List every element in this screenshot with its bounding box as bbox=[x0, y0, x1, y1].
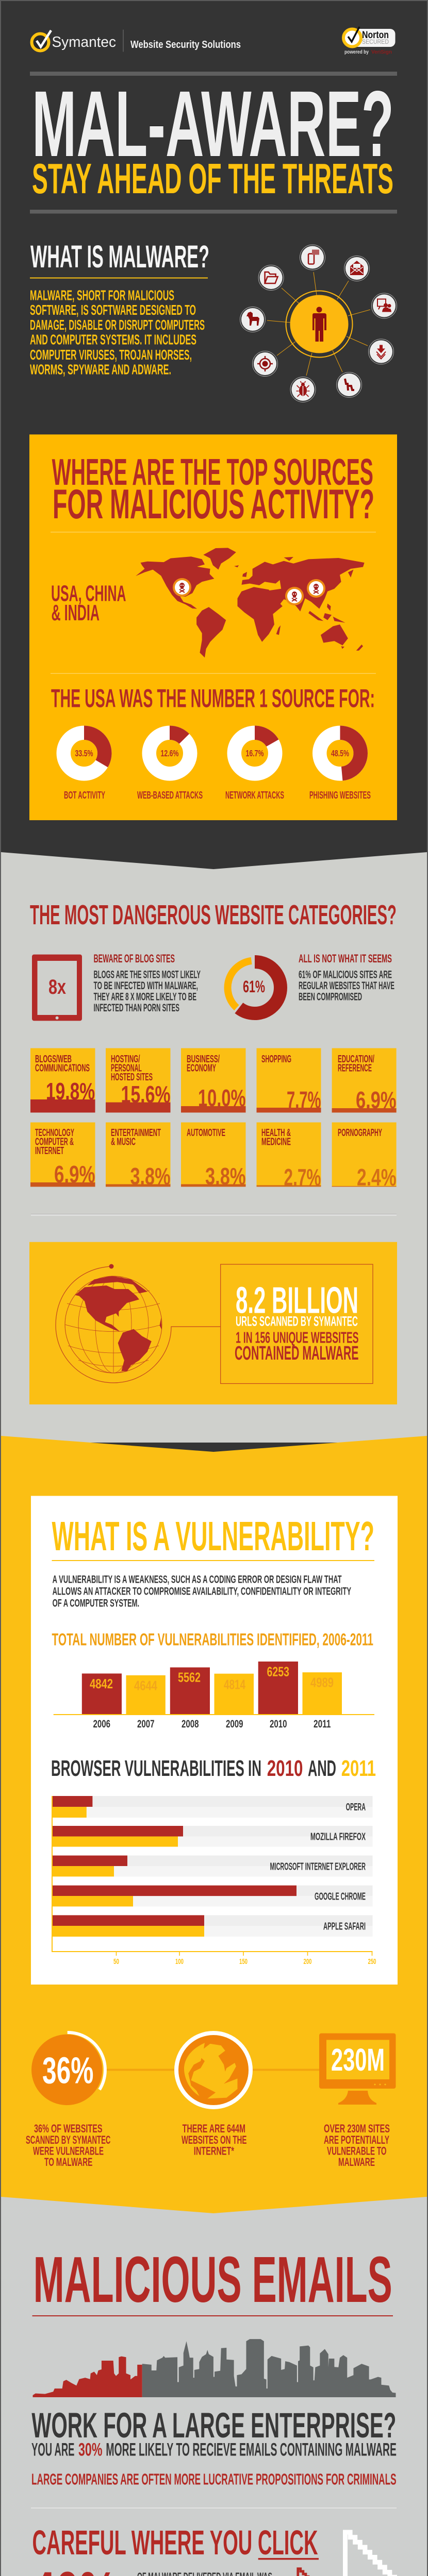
text block: malware definition bbox=[30, 287, 205, 378]
icon: trojan horse bbox=[240, 307, 265, 332]
chart: browser vulnerabilities bars: 50 bbox=[113, 1958, 119, 1966]
panel: entertainment tile: ENTERTAINMENT bbox=[111, 1127, 161, 1139]
stat: 36 percent circle bbox=[31, 2032, 105, 2105]
text block: 644M caption: WEBSITES ON THE bbox=[182, 2133, 246, 2146]
panel: technology tile: 6.9% bbox=[54, 1161, 95, 1188]
chart: vulnerabilities per year: 5562 bbox=[178, 1669, 201, 1685]
panel: shopping tile bbox=[257, 1048, 321, 1113]
panel: shopping tile: 7.7% bbox=[287, 1086, 321, 1113]
chart: browser vulnerabilities bars: 250 bbox=[368, 1958, 376, 1966]
heading bbox=[52, 451, 374, 528]
text block: 36% caption: WERE VULNERABLE bbox=[33, 2144, 104, 2158]
icon: tablet with 8x: 8x bbox=[48, 976, 66, 998]
chart: vulnerabilities per year: 4842 bbox=[90, 1676, 113, 1691]
chart: network attacks donut: 16.7% bbox=[245, 748, 264, 758]
chart: phishing websites donut: PHISHING WEBSITES bbox=[309, 790, 371, 801]
icon: red pixel cursor bbox=[298, 2569, 324, 2576]
text block: 644M caption bbox=[182, 2122, 246, 2158]
text: USA, China and India: USA, CHINA bbox=[51, 581, 126, 606]
panel: pornography tile: PORNOGRAPHY bbox=[338, 1127, 382, 1139]
heading: browser vulnerabilities: BROWSER VULNERABILITIES IN bbox=[51, 1756, 261, 1781]
chart: 61% donut bbox=[228, 961, 281, 1013]
text block: 230M caption: OVER 230M SITES bbox=[324, 2122, 390, 2135]
panel: education tile bbox=[332, 1048, 397, 1113]
panel: top sources for malicious activity bbox=[29, 434, 397, 820]
panel: education tile: EDUCATION/ bbox=[338, 1054, 374, 1065]
chart: bot activity donut: BOT ACTIVITY bbox=[64, 790, 105, 801]
chart: bot activity donut: 33.5% bbox=[75, 748, 93, 758]
panel: technology tile: TECHNOLOGY bbox=[35, 1127, 74, 1139]
icon: target bbox=[253, 351, 277, 376]
text block: all is not what it seems: BEEN COMPROMISED bbox=[299, 991, 362, 1003]
panel: hosting tile: 15.6% bbox=[121, 1081, 170, 1108]
icon: Norton secured seal: VeriSign bbox=[371, 49, 392, 55]
chart: vulnerabilities per year: 2007 bbox=[137, 1718, 155, 1730]
text block: 230M caption bbox=[324, 2122, 390, 2168]
chart: browser vulnerabilities bars: 200 bbox=[303, 1958, 311, 1966]
section: what is malware bbox=[30, 239, 397, 402]
text block: beware of blog sites: BLOGS ARE THE SITES MOST LIKELY bbox=[94, 969, 201, 981]
text block: beware of blog sites: INFECTED THAN PORN SITES bbox=[94, 1002, 179, 1014]
panel: pornography tile bbox=[332, 1122, 397, 1191]
text block: 644M caption: THERE ARE 644M bbox=[183, 2122, 245, 2135]
panel: hosting tile: PERSONAL bbox=[111, 1062, 142, 1074]
text block: malware definition: MALWARE, SHORT FOR MALICIOUS bbox=[30, 287, 174, 303]
text block: vulnerability definition bbox=[53, 1573, 351, 1609]
chart: web-based attacks donut: WEB-BASED ATTACKS bbox=[137, 790, 203, 801]
icon: globe with orbit bbox=[56, 1264, 221, 1383]
text block: beware of blog sites: THEY ARE 8 X MORE LIKELY TO BE bbox=[94, 991, 196, 1003]
text: USA, China and India: & INDIA bbox=[52, 601, 100, 625]
text block: malware definition: SOFTWARE, IS SOFTWARE DESIGNED TO bbox=[30, 302, 196, 318]
chart: browser vulnerabilities bars: GOOGLE CHROME bbox=[315, 1891, 366, 1903]
chart: browser vulnerabilities bars bbox=[52, 1796, 376, 1966]
icon: USA skull marker bbox=[173, 578, 191, 597]
heading: browser vulnerabilities: 2010 bbox=[267, 1756, 303, 1781]
text block: 36% caption bbox=[26, 2122, 110, 2168]
text block: beware of blog sites: TO BE INFECTED WITH MALWARE, bbox=[94, 980, 198, 992]
text block: 36% caption: TO MALWARE bbox=[44, 2156, 92, 2168]
panel: entertainment tile: 3.8% bbox=[130, 1163, 170, 1190]
panel: 8.2 billion urls scanned bbox=[29, 1242, 397, 1404]
panel: blogs tile: COMMUNICATIONS bbox=[35, 1062, 90, 1074]
icon: envelope bbox=[344, 256, 369, 281]
text block: beware of blog sites: BEWARE OF BLOG SITES bbox=[94, 952, 175, 965]
icon: bug bbox=[290, 377, 316, 402]
chart: city skyline 30 percent bbox=[33, 2339, 396, 2397]
panel: technology tile bbox=[30, 1122, 95, 1188]
chart: web-based attacks donut: 12.6% bbox=[161, 748, 179, 758]
chart: 61% donut: 61% bbox=[243, 977, 265, 996]
panel: shopping tile: SHOPPING bbox=[261, 1054, 291, 1065]
chart: vulnerabilities per year: 2006 bbox=[93, 1718, 110, 1730]
text: website security solutions: Website Security Solutions bbox=[130, 39, 241, 50]
chart: web-based attacks donut bbox=[137, 733, 203, 801]
text block: malware definition: AND COMPUTER SYSTEMS. IT INCLUDES bbox=[30, 332, 196, 348]
heading: browser vulnerabilities: 2011 bbox=[341, 1756, 376, 1781]
icon: presentation bbox=[371, 293, 397, 318]
stat: 36 percent circle: 36% bbox=[42, 2050, 94, 2092]
text block: malware definition: DAMAGE, DISABLE OR DISRUPT COMPUTERS bbox=[30, 317, 205, 333]
icon: Symantec logo bbox=[32, 30, 116, 50]
chart: vulnerabilities per year: 2010 bbox=[270, 1718, 287, 1730]
panel: hosting tile bbox=[106, 1048, 170, 1113]
chart: vulnerabilities per year: 4989 bbox=[310, 1675, 334, 1690]
panel: automotive tile bbox=[181, 1122, 245, 1190]
chart: world map with malware hotspots bbox=[136, 548, 365, 657]
icon: globe bbox=[176, 2033, 251, 2107]
icon: monitor with 230M: 230M bbox=[331, 2042, 385, 2077]
text block: 644M caption: INTERNET* bbox=[194, 2144, 234, 2158]
panel: automotive tile: 3.8% bbox=[205, 1163, 245, 1190]
heading: browser vulnerabilities: AND bbox=[308, 1756, 336, 1781]
text block: 36% caption: SCANNED BY SYMANTEC bbox=[26, 2133, 110, 2146]
panel: business tile: BUSINESS/ bbox=[187, 1054, 220, 1065]
panel: health tile: 2.7% bbox=[284, 1164, 321, 1191]
diagram: malware threats around a person bbox=[240, 245, 397, 402]
icon: monitor with 230M bbox=[319, 2033, 396, 2105]
chart: browser vulnerabilities bars: APPLE SAFARI bbox=[323, 1921, 366, 1932]
callout: stat box bbox=[221, 1264, 373, 1384]
panel: technology tile: INTERNET bbox=[35, 1145, 64, 1157]
text: 30 percent more likely: 30% bbox=[78, 2440, 102, 2460]
panel: education tile: 6.9% bbox=[356, 1087, 397, 1113]
text block: malware definition: COMPUTER VIRUSES, TROJAN HORSES, bbox=[30, 347, 192, 363]
panel: blogs tile: 19.8% bbox=[46, 1078, 95, 1105]
panel: pornography tile: 2.4% bbox=[357, 1164, 397, 1191]
text block: 36% caption: 36% OF WEBSITES bbox=[34, 2122, 102, 2135]
section: website vulnerability stats bbox=[26, 2032, 396, 2168]
chart: browser vulnerabilities bars: OPERA bbox=[346, 1802, 366, 1813]
panel: business tile bbox=[181, 1048, 245, 1113]
panel: hosting tile: HOSTED SITES bbox=[111, 1072, 153, 1083]
panel: business tile: ECONOMY bbox=[187, 1062, 216, 1074]
section: malicious emails bbox=[31, 2243, 397, 2576]
chart: phishing websites donut: 48.5% bbox=[331, 748, 349, 758]
panel: blogs tile: BLOGS/WEB bbox=[35, 1054, 72, 1065]
section: dangerous website categories bbox=[30, 900, 397, 1216]
chart: vulnerabilities per year: 6253 bbox=[267, 1664, 289, 1680]
heading: WHAT IS MALWARE? bbox=[30, 239, 209, 274]
chart: vulnerabilities per year: 4814 bbox=[224, 1677, 245, 1692]
panel: entertainment tile: & MUSIC bbox=[111, 1136, 136, 1147]
panel: business tile: 10.0% bbox=[198, 1084, 245, 1111]
panel: entertainment tile bbox=[106, 1122, 170, 1190]
chart: network attacks donut bbox=[225, 733, 284, 801]
icon: folder bbox=[258, 265, 284, 291]
chart: browser vulnerabilities bars: MOZILLA FIREFOX bbox=[310, 1831, 366, 1842]
text: 30 percent more likely: YOU ARE bbox=[31, 2440, 74, 2460]
text block: 230M caption: MALWARE bbox=[338, 2156, 375, 2168]
icon: China skull marker bbox=[307, 579, 325, 598]
icon: Norton secured seal bbox=[343, 27, 395, 55]
header: logos bbox=[32, 27, 395, 55]
chart: bot activity donut bbox=[63, 733, 105, 801]
text block: all is not what it seems bbox=[299, 952, 394, 1003]
panel: health tile: HEALTH & bbox=[261, 1127, 291, 1139]
chart: vulnerabilities per year: 2009 bbox=[226, 1718, 243, 1730]
panel: blogs tile bbox=[30, 1048, 95, 1113]
icon: Norton secured seal: powered by bbox=[344, 49, 369, 55]
chart: vulnerabilities per year bbox=[54, 1662, 374, 1730]
icon: Norton secured seal: Norton bbox=[362, 30, 389, 41]
text block: malware definition: WORMS, SPYWARE AND ADWARE. bbox=[30, 362, 171, 378]
panel: automotive tile: AUTOMOTIVE bbox=[187, 1127, 225, 1139]
icon: tablet with 8x bbox=[32, 955, 82, 1021]
chart: browser vulnerabilities bars: 150 bbox=[239, 1958, 248, 1966]
icon: India skull marker bbox=[285, 587, 304, 605]
chart: browser vulnerabilities bars: 100 bbox=[175, 1958, 184, 1966]
icon: worm bbox=[336, 372, 362, 398]
text block: 230M caption: ARE POTENTIALLY bbox=[324, 2133, 389, 2146]
panel: education tile: REFERENCE bbox=[338, 1062, 372, 1074]
chart: vulnerabilities per year: 4644 bbox=[134, 1677, 157, 1693]
icon: mobile phone bbox=[300, 245, 325, 270]
text: USA, China and India bbox=[51, 581, 126, 625]
icon: Symantec logo: Symantec bbox=[52, 34, 116, 50]
icon: download bbox=[368, 339, 394, 364]
chart: phishing websites donut bbox=[309, 733, 371, 801]
text block: 230M caption: VULNERABLE TO bbox=[327, 2144, 387, 2158]
panel: technology tile: COMPUTER & bbox=[35, 1136, 74, 1147]
panel: health tile bbox=[257, 1122, 321, 1191]
text block: beware of blog sites bbox=[94, 952, 201, 1014]
chart: vulnerabilities per year: 2008 bbox=[182, 1718, 199, 1730]
panel: hosting tile: HOSTING/ bbox=[111, 1054, 140, 1065]
chart: vulnerabilities per year: 2011 bbox=[314, 1718, 331, 1730]
text block: vulnerability definition: OF A COMPUTER SYSTEM. bbox=[53, 1597, 139, 1609]
chart: network attacks donut: NETWORK ATTACKS bbox=[225, 790, 284, 801]
icon: person bbox=[312, 307, 326, 342]
icon: white pixel cursor bbox=[345, 2532, 394, 2576]
panel: what is a vulnerability bbox=[31, 1496, 398, 1985]
icon: Norton secured seal: SECURED bbox=[362, 39, 389, 45]
panel: health tile: MEDICINE bbox=[261, 1136, 291, 1147]
